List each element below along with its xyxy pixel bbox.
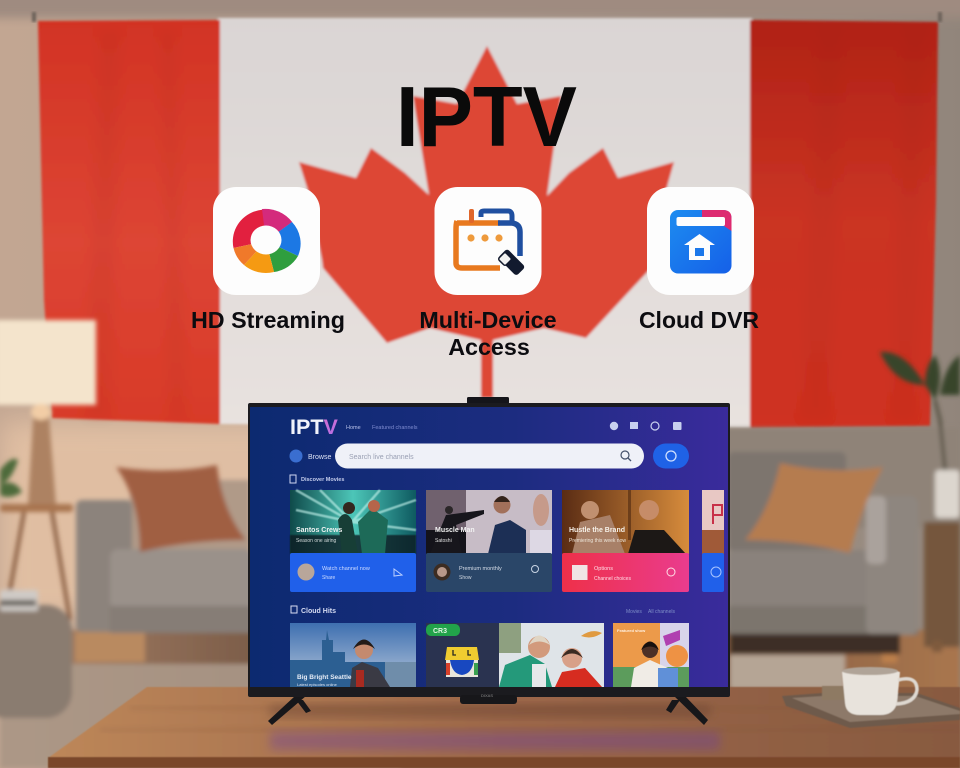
flag hanging rod ends	[32, 12, 942, 22]
lamp	[0, 320, 96, 505]
icon: device calendar and remote	[456, 209, 525, 276]
tv screen	[250, 407, 728, 687]
sofa right	[728, 452, 918, 663]
green tag	[426, 624, 460, 636]
header icons	[610, 422, 682, 430]
wall band	[470, 428, 960, 528]
card: movie two: Muscle Man	[435, 527, 475, 534]
tray and coffee cup	[782, 667, 960, 728]
tile: city presenter: Big Bright Seattle	[297, 674, 352, 681]
card two footer	[426, 553, 552, 592]
plant left	[0, 459, 22, 497]
card: movie one: Watch channel now	[322, 566, 370, 572]
icon tile	[434, 187, 542, 295]
icon: colour ring	[233, 209, 301, 273]
floor	[0, 630, 960, 768]
card: movie three	[562, 490, 689, 592]
flag right red band	[750, 20, 938, 428]
maple leaf	[299, 46, 674, 398]
section heading two: Movies	[626, 609, 642, 615]
tile: channel logo: CR3	[433, 628, 447, 635]
side table left	[0, 504, 73, 620]
card: movie two: Show	[459, 575, 472, 581]
section heading one: Discover Movies	[301, 477, 344, 483]
label: Multi-Device	[419, 307, 557, 333]
screen logo: IPTV	[290, 415, 338, 439]
tile: orange portrait	[613, 623, 689, 687]
card: movie three: Premiering this week now	[569, 538, 626, 544]
icon tile	[213, 187, 320, 295]
search row: Browse	[308, 454, 331, 461]
section heading one	[290, 475, 344, 483]
card: movie one: Santos Crews	[296, 527, 342, 534]
card three footer	[562, 553, 689, 592]
label	[419, 307, 557, 360]
tv logo chin: DIXAS	[481, 693, 493, 698]
flag white centre	[218, 18, 752, 428]
card: movie three: Options	[594, 566, 613, 572]
tv bezel	[248, 403, 730, 697]
card: movie two: Premium monthly	[459, 566, 502, 572]
tray	[782, 693, 960, 728]
tv: television	[248, 397, 730, 704]
screen header: Home	[346, 425, 361, 431]
search button	[653, 444, 689, 468]
card: movie one: Season one airing	[296, 538, 337, 544]
card: movie two	[426, 490, 552, 592]
table: wooden table top	[48, 687, 960, 768]
screen header	[290, 415, 682, 439]
room: blurred furniture	[0, 320, 960, 768]
card: movie four partial	[702, 490, 724, 592]
flag left red band	[38, 20, 220, 424]
card: movie three: Hustle the Brand	[569, 527, 625, 534]
icon tile	[647, 187, 754, 295]
title: IPTV	[396, 70, 577, 165]
tile: channel logo	[426, 623, 499, 687]
tv camera	[467, 397, 509, 404]
label: Access	[448, 334, 530, 360]
plant right	[880, 352, 960, 518]
tile glyph	[445, 647, 479, 660]
section heading two: Cloud Hits	[301, 608, 336, 615]
tile: orange portrait: Featured show	[617, 628, 646, 633]
card: movie one	[290, 490, 416, 592]
tile: city presenter	[290, 623, 416, 687]
sofa left	[76, 480, 252, 633]
flag: Canadian flag on wall	[38, 18, 938, 428]
pillow left	[116, 465, 246, 552]
card one footer	[290, 553, 416, 592]
screen header: Featured channels	[372, 425, 418, 431]
icon: blue panel with home	[670, 210, 732, 274]
section heading two	[291, 606, 675, 615]
search row	[290, 444, 689, 468]
search bar	[335, 444, 644, 468]
label: Cloud DVR	[639, 307, 759, 333]
feature: Cloud DVR	[639, 187, 759, 333]
pillow right	[745, 463, 883, 553]
ottoman and books	[0, 590, 72, 718]
feature: Multi-Device Access	[419, 187, 557, 360]
cup	[842, 668, 900, 715]
search row: Search live channels	[349, 454, 414, 461]
flag fold shading	[85, 30, 925, 420]
tile: city presenter: Latest episodes online	[297, 682, 338, 687]
card: movie two: Satoshi	[435, 538, 452, 544]
tv stand legs	[268, 696, 708, 725]
side table right	[924, 522, 960, 652]
label: HD Streaming	[191, 307, 345, 333]
feature: HD Streaming	[191, 187, 345, 333]
section heading two: All channels	[648, 609, 675, 615]
tile: happy couple	[499, 623, 604, 687]
card: movie three: Channel choices	[594, 576, 631, 582]
tv logo chin	[460, 693, 517, 704]
card: movie one: Share	[322, 575, 336, 581]
